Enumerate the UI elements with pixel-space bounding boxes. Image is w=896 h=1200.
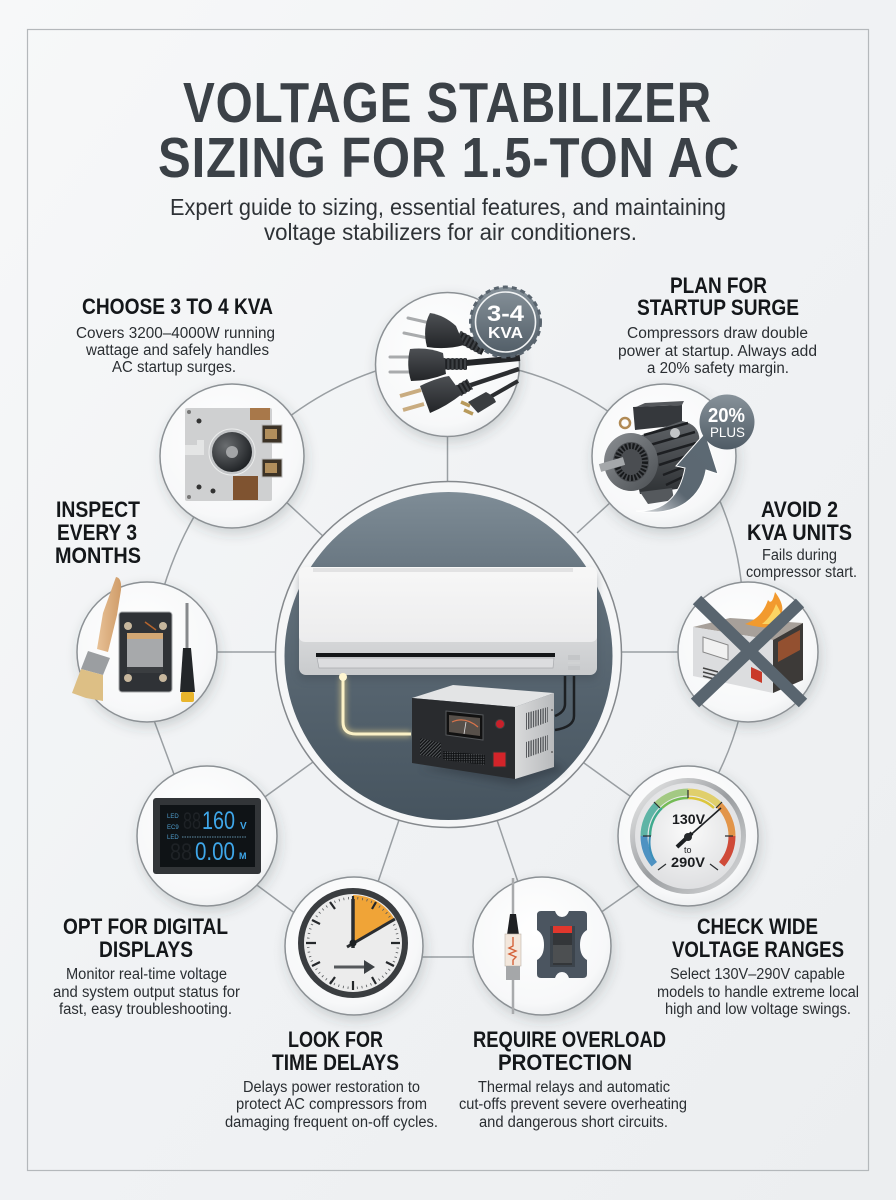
icon: paint brush bbox=[72, 577, 121, 701]
icon: LED voltage display: 160 bbox=[202, 807, 235, 835]
text: opt for digital displays: and system output status for bbox=[53, 984, 240, 1001]
text: check wide voltage ranges: models to handle extreme local bbox=[657, 984, 859, 1001]
node: digital display bbox=[137, 766, 277, 906]
badge: 20% plus: 20% bbox=[708, 405, 745, 427]
node: timer clock bbox=[285, 877, 423, 1015]
text: avoid 2 KVA units: Fails during bbox=[762, 547, 837, 564]
subtitle: Expert guide to sizing, essential features, and maintaining bbox=[170, 194, 726, 220]
text: look for time delays bbox=[225, 1027, 438, 1131]
icon: analog gauge bbox=[630, 778, 746, 894]
text: check wide voltage ranges: VOLTAGE RANGES bbox=[672, 937, 844, 962]
text: plan for startup surge: power at startup. Always add bbox=[618, 343, 817, 360]
center ring bbox=[276, 482, 622, 828]
icon: rocker switch bbox=[537, 911, 587, 978]
text: require overload protection: Thermal relays and automatic bbox=[478, 1079, 670, 1096]
icon: opened enclosure bbox=[119, 612, 172, 692]
node circle bbox=[678, 582, 818, 722]
text: check wide voltage ranges: high and low voltage swings. bbox=[665, 1001, 851, 1018]
text: inspect every 3 months: INSPECT bbox=[56, 497, 140, 522]
title: VOLTAGE STABILIZER bbox=[183, 71, 712, 135]
text: plan for startup surge: Compressors draw double bbox=[627, 325, 808, 342]
text: opt for digital displays bbox=[53, 914, 240, 1018]
badge: 20% plus: PLUS bbox=[710, 424, 745, 440]
icon: burning stabilizer bbox=[693, 592, 803, 693]
icon: upward arrow bbox=[636, 433, 718, 512]
node: relay mechanism bbox=[160, 384, 304, 528]
icon: LED voltage display: M bbox=[239, 851, 246, 861]
node circle bbox=[77, 582, 217, 722]
text: plan for startup surge: STARTUP SURGE bbox=[637, 295, 799, 320]
badge: 3-4 KVA: KVA bbox=[488, 325, 523, 342]
text: avoid 2 KVA units bbox=[746, 497, 857, 581]
icon: air conditioner bbox=[299, 567, 597, 680]
node circle bbox=[618, 766, 758, 906]
icon: electric motor bbox=[600, 401, 699, 504]
badge: 20% plus bbox=[700, 394, 754, 450]
text: opt for digital displays: OPT FOR DIGITAL bbox=[63, 914, 228, 939]
subtitle: voltage stabilizers for air conditioners. bbox=[264, 219, 637, 245]
text: plan for startup surge: PLAN FOR bbox=[670, 273, 767, 298]
text: opt for digital displays: Monitor real-time voltage bbox=[66, 966, 227, 983]
icon: analog gauge: 130V bbox=[672, 811, 706, 827]
node: maintenance tools bbox=[72, 577, 217, 722]
text: choose 3 to 4 KVA: AC startup surges. bbox=[112, 359, 236, 376]
text: avoid 2 KVA units: AVOID 2 bbox=[761, 497, 838, 522]
icon: relay bbox=[185, 408, 282, 501]
text: opt for digital displays: fast, easy troubleshooting. bbox=[59, 1001, 232, 1018]
icon: LED voltage display: EC9 bbox=[167, 825, 179, 831]
text: require overload protection: REQUIRE OVERLOAD bbox=[473, 1027, 666, 1052]
icon: analog gauge: to bbox=[684, 845, 692, 855]
node: burned 2 KVA unit bbox=[678, 582, 818, 722]
node: fuse and switch bbox=[473, 877, 611, 1015]
text: check wide voltage ranges: CHECK WIDE bbox=[697, 914, 818, 939]
text: look for time delays: LOOK FOR bbox=[288, 1027, 383, 1052]
text: choose 3 to 4 KVA bbox=[76, 294, 275, 376]
node circle bbox=[137, 766, 277, 906]
icon: glowing power cable bbox=[339, 673, 411, 734]
text: look for time delays: Delays power restoration to bbox=[243, 1079, 420, 1096]
node circle bbox=[592, 384, 736, 528]
icon: power plugs bbox=[390, 313, 520, 414]
icon: LED voltage display: V bbox=[240, 821, 247, 832]
icon: screwdriver bbox=[180, 603, 195, 702]
text: choose 3 to 4 KVA: CHOOSE 3 TO 4 KVA bbox=[82, 294, 273, 319]
icon: analog gauge: 290V bbox=[671, 854, 706, 870]
text: avoid 2 KVA units: KVA UNITS bbox=[747, 520, 852, 545]
icon: thermal fuse bbox=[505, 878, 521, 1014]
icon: crossed-out X bbox=[695, 600, 803, 703]
text: inspect every 3 months: MONTHS bbox=[55, 543, 141, 568]
icon: LED voltage display bbox=[153, 798, 261, 874]
node circle bbox=[376, 292, 520, 436]
text: require overload protection bbox=[459, 1027, 687, 1131]
text: look for time delays: protect AC compressors from bbox=[236, 1096, 427, 1113]
icon: LED voltage display: 0.00 bbox=[195, 838, 235, 866]
icon: LED voltage display: 88 bbox=[170, 839, 192, 866]
text: inspect every 3 months bbox=[55, 497, 141, 568]
text: require overload protection: PROTECTION bbox=[498, 1050, 632, 1075]
icon: black output cables bbox=[555, 676, 574, 730]
text: plan for startup surge bbox=[618, 273, 817, 377]
icon: LED voltage display: 88 bbox=[183, 808, 201, 835]
text: inspect every 3 months: EVERY 3 bbox=[57, 520, 137, 545]
text: avoid 2 KVA units: compressor start. bbox=[746, 564, 857, 581]
node circle bbox=[473, 877, 611, 1015]
connector network: ring and spokes bbox=[152, 368, 742, 957]
text: plan for startup surge: a 20% safety margin. bbox=[647, 360, 789, 377]
text: look for time delays: TIME DELAYS bbox=[272, 1050, 399, 1075]
text: opt for digital displays: DISPLAYS bbox=[99, 937, 193, 962]
node circle bbox=[160, 384, 304, 528]
node circle bbox=[285, 877, 423, 1015]
text: choose 3 to 4 KVA: Covers 3200–4000W running bbox=[76, 325, 275, 342]
badge: 3-4 KVA bbox=[470, 287, 540, 357]
dark backdrop bbox=[284, 492, 612, 820]
title: SIZING FOR 1.5-TON AC bbox=[158, 126, 740, 190]
text: check wide voltage ranges: Select 130V–290V capable bbox=[670, 966, 845, 983]
icon: voltage stabilizer box bbox=[412, 685, 565, 785]
title bbox=[158, 71, 740, 190]
text: check wide voltage ranges bbox=[657, 914, 859, 1018]
node: voltage gauge bbox=[618, 766, 758, 906]
text: require overload protection: cut-offs prevent severe overheating bbox=[459, 1096, 687, 1113]
text: require overload protection: and dangerous short circuits. bbox=[479, 1114, 668, 1131]
icon: LED voltage display: LED bbox=[167, 835, 179, 841]
icon: clock bbox=[298, 888, 408, 998]
text: look for time delays: damaging frequent on-off cycles. bbox=[225, 1114, 438, 1131]
badge: 3-4 KVA: 3-4 bbox=[487, 301, 525, 326]
node: plugs bbox=[376, 287, 540, 436]
node: motor bbox=[592, 384, 754, 528]
icon: LED voltage display: LED bbox=[167, 814, 179, 820]
subtitle bbox=[170, 194, 726, 245]
center illustration: AC and stabilizer bbox=[276, 482, 622, 828]
text: choose 3 to 4 KVA: wattage and safely handles bbox=[85, 342, 269, 359]
